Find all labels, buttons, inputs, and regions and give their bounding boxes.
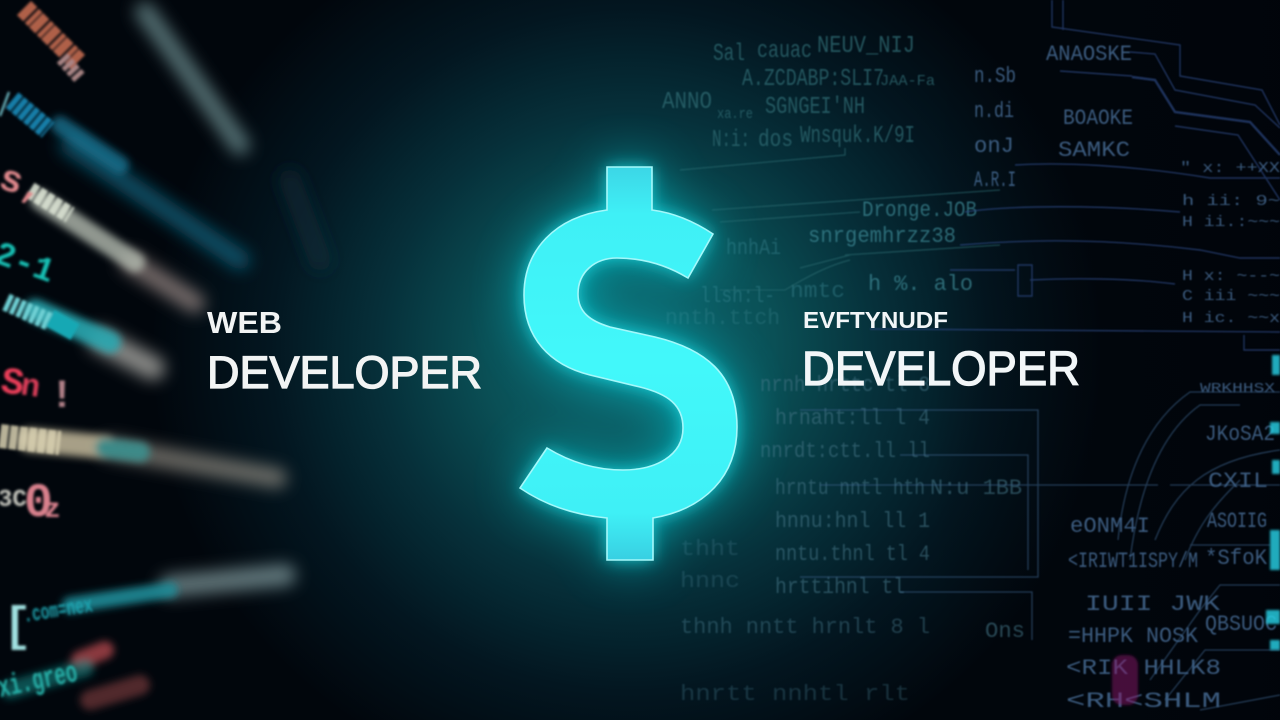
right column code: n.Sb	[974, 64, 1016, 89]
central code table: Ons	[985, 619, 1025, 644]
top code block: Sal	[713, 41, 745, 68]
right column code: n.di	[974, 99, 1014, 124]
right column code: H ic. ~~x	[1182, 310, 1280, 327]
right column code: onJ	[974, 134, 1014, 159]
sharp code fragments: .com=nex	[21, 593, 95, 629]
mid code block: Dronge.JOB	[862, 198, 977, 223]
mid code block: nmtc	[790, 279, 845, 304]
right column code: C iii ~~~	[1182, 288, 1280, 305]
top code block: A.ZCDABP:SLI7	[742, 66, 884, 93]
central code table: hnnu:hnl ll 1	[775, 509, 930, 534]
central code table: hrntu nntl hth	[775, 476, 925, 501]
right column code: <IRIWT1ISPY/M	[1068, 549, 1198, 574]
label line: garbled software: EVFTYNUDF	[803, 307, 948, 333]
top code block: JAA-Fa	[880, 73, 935, 90]
magenta smudge	[1112, 655, 1138, 705]
central code table: hnnc	[680, 569, 740, 594]
central code table	[680, 373, 1025, 707]
mid code block: h %. alo	[868, 272, 973, 297]
sharp code fragments: z	[44, 495, 61, 526]
right column code: CXIL	[1208, 469, 1268, 494]
sharp code fragments	[0, 8, 95, 707]
top code block: NEUV_NIJ	[817, 33, 915, 60]
central code table: N:u 1BB	[930, 476, 1022, 501]
mid code block: snrgemhrzz38	[808, 224, 956, 249]
right column code: =HHPK NOSK	[1068, 624, 1199, 649]
right column code: H ii.:~~~	[1182, 214, 1280, 231]
central code table: nntu.thnl tl 4	[775, 542, 930, 567]
central code table: thnh nntt hrnlt 8 l	[680, 615, 930, 640]
mid code block: hnhAi	[726, 236, 781, 261]
top code block: Wnsquk.K/9I	[800, 123, 915, 150]
mid code block: llsh:l-	[700, 284, 775, 309]
right column code	[974, 42, 1280, 714]
central code table: nnrdt:ctt.ll ll	[760, 439, 930, 464]
right column code: *SfoK	[1205, 546, 1268, 571]
central code table: nrnh hrttc tl 8	[760, 373, 930, 398]
sharp code fragments: !	[50, 375, 74, 420]
right column code: " x: ++XX	[1180, 160, 1280, 177]
right column code: h ii: 9~	[1182, 193, 1280, 210]
mid code block: nnth.ttch	[665, 306, 780, 331]
top code block	[662, 33, 935, 154]
right column code: WRKHHSX	[1200, 381, 1276, 397]
label line: developer: DEVELOPER	[207, 347, 482, 398]
panel: faint circuit and code on the right	[662, 0, 1280, 714]
top code block: dos	[758, 127, 793, 154]
top code block: SGNGEI'NH	[765, 94, 865, 121]
right column code: IUII JWK	[1085, 592, 1221, 617]
semi sharp streak group	[10, 125, 170, 700]
top code block: N:i:	[712, 127, 750, 154]
label line: developer: DEVELOPER	[802, 343, 1080, 396]
circuit lines	[870, 0, 1280, 350]
sharp code fragments: 0	[24, 477, 53, 531]
label: web developer	[207, 305, 482, 398]
right column code: A.R.I	[974, 168, 1016, 193]
mid code block	[665, 198, 977, 331]
label line: web: WEB	[207, 305, 282, 340]
right column code: BOAOKE	[1063, 106, 1133, 131]
right column code: <RIK HHLK8	[1066, 656, 1221, 681]
right column code: ANAOSKE	[1046, 42, 1132, 67]
central code table: hrnaht:ll l 4	[775, 406, 930, 431]
icon: glowing dollar sign	[520, 167, 737, 560]
circuit lines lower	[680, 148, 1280, 710]
panel: blurred code streaks on the left	[0, 8, 320, 707]
top code block: cauac	[757, 38, 812, 65]
sharp code fragments: [	[3, 601, 32, 655]
right edge light strip	[1266, 355, 1280, 650]
top code block: ANNO	[662, 89, 712, 116]
right column code: SAMKC	[1058, 138, 1130, 163]
central code table: hnrtt nnhtl rlt	[680, 682, 910, 707]
sharp code fragments: n	[18, 368, 42, 407]
blurred streak group	[70, 12, 320, 586]
right column code: <RH<SHLM	[1066, 689, 1221, 714]
label: software developer	[802, 307, 1080, 396]
central code table: hrttihnl tl	[775, 575, 905, 600]
top code block: xa.re	[717, 106, 753, 123]
right column code: H x: ~--~	[1182, 268, 1280, 285]
right column code: eONM4I	[1070, 514, 1150, 539]
central code table: thht	[680, 537, 740, 562]
